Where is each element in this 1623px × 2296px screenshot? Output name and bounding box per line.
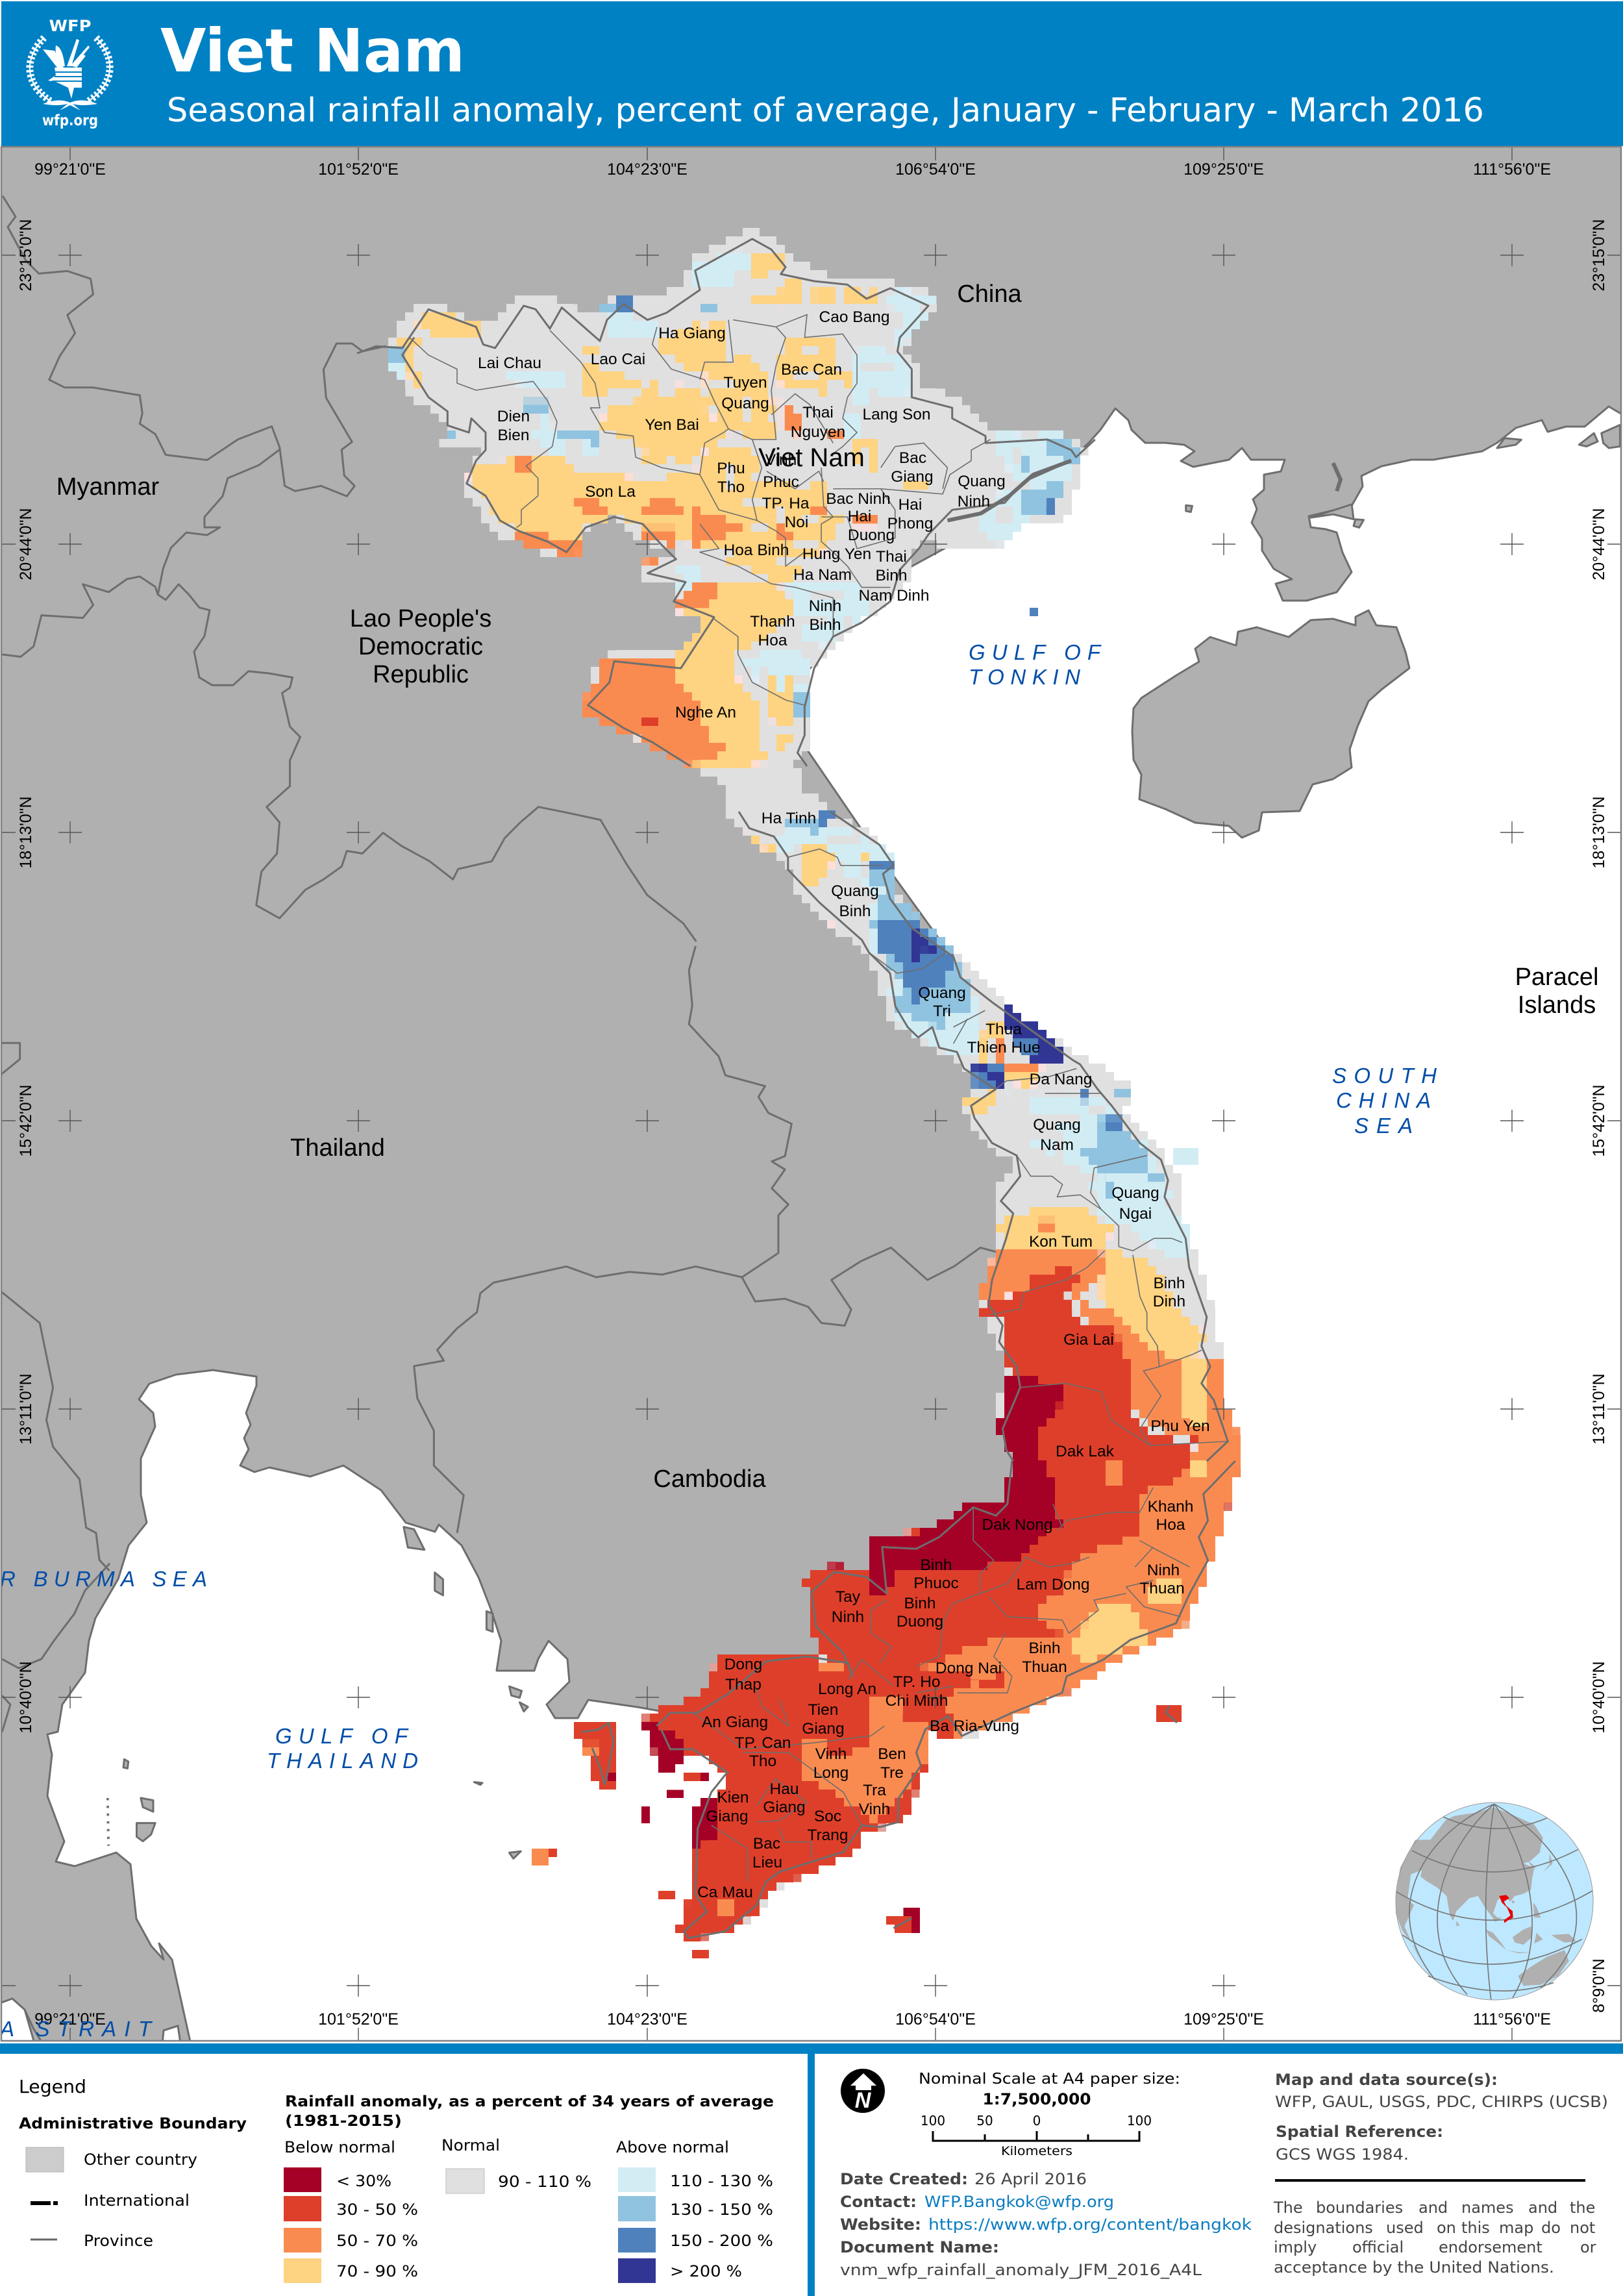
disclaimer: acceptance by the United Nations. — [1274, 2258, 1554, 2277]
province labels north: Dien — [497, 408, 530, 425]
province labels south: Ninh — [832, 1608, 864, 1626]
province labels north: TP. Ha — [762, 495, 810, 512]
legend: rainfall anomaly: (1981-2015) — [285, 2113, 402, 2130]
latitude labels right: 20°44'0"N — [1590, 508, 1608, 580]
province labels centre — [762, 810, 1210, 1460]
sea labels: CHINA — [1336, 1088, 1431, 1112]
province labels south: Thap — [725, 1676, 762, 1693]
latitude labels right: 15°42'0"N — [1590, 1084, 1608, 1157]
disclaimer: boundaries — [1316, 2199, 1403, 2217]
province labels centre: Tri — [933, 1003, 951, 1020]
longitude labels top: 111°56'0"E — [1473, 160, 1551, 179]
sea labels: GULF OF — [275, 1724, 409, 1748]
legend: administrative boundary: Other country — [84, 2151, 197, 2169]
province labels south: Lam Dong — [1016, 1576, 1090, 1593]
disclaimer: and — [1528, 2199, 1557, 2217]
province labels north: Lai Chau — [478, 355, 541, 372]
latitude labels left: 18°13'0"N — [17, 796, 35, 869]
sea labels: GULF OF — [969, 640, 1102, 664]
country labels: Democratic — [358, 633, 483, 660]
raster: navy over 200 percent — [906, 923, 1061, 1089]
legend: administrative boundary: Province — [84, 2232, 153, 2250]
province labels north: Noi — [785, 514, 808, 531]
disclaimer: names — [1461, 2199, 1514, 2217]
province labels south: Thuan — [1022, 1658, 1067, 1676]
legend class labels: < 30% — [336, 2172, 391, 2190]
sources and spatial reference: GCS WGS 1984. — [1276, 2145, 1409, 2164]
raster: red 30-50 percent Nghe An — [642, 716, 661, 728]
scale block: 1:7,500,000 — [983, 2090, 1091, 2108]
sea labels: R BURMA SEA — [0, 1567, 207, 1591]
raster: southern red base 30-50 percent — [632, 1461, 1240, 1941]
province labels north: Binh — [875, 567, 908, 584]
disclaimer: do — [1541, 2219, 1561, 2237]
province labels south: Bac — [753, 1835, 780, 1853]
province labels north: Hoa — [758, 632, 787, 649]
strait corner — [2, 1997, 35, 2040]
legend: rainfall anomaly: Rainfall anomaly, as a percent of 34 years of average — [285, 2093, 774, 2110]
province labels north: Thai — [802, 404, 834, 421]
province labels south: Giang — [763, 1799, 806, 1816]
province labels centre: Ha Tinh — [762, 810, 816, 827]
latitude labels right: 13°11'0"N — [1590, 1373, 1608, 1445]
logo: WFP emblem — [30, 17, 110, 129]
latitude labels left: 23°15'0"N — [17, 219, 35, 292]
globe Viet Nam highlight — [1499, 1895, 1513, 1923]
swatch normal — [446, 2169, 484, 2193]
province labels south: Vinh — [815, 1745, 847, 1763]
country labels: Lao People's — [350, 605, 491, 632]
province labels south: Tay — [836, 1588, 861, 1606]
province labels north: Tho — [717, 479, 745, 496]
province labels south: Dong — [725, 1656, 762, 1673]
scale bar: 0 — [1033, 2113, 1041, 2128]
province labels north: Bac Ninh — [826, 490, 891, 508]
province labels south: Long — [813, 1764, 849, 1782]
swatch: other country — [26, 2147, 64, 2172]
province labels north: Lao Cai — [591, 351, 645, 368]
province labels north: Yen Bai — [645, 416, 699, 434]
disclaimer: the — [1570, 2199, 1595, 2217]
document details: WFP.Bangkok@wfp.org — [924, 2193, 1114, 2211]
province labels south: Soc — [814, 1808, 841, 1825]
scale bar — [921, 2113, 1152, 2158]
province labels centre: Phu Yen — [1150, 1417, 1210, 1435]
document details: Document Name: — [840, 2238, 999, 2256]
longitude labels top: 99°21'0"E — [34, 160, 106, 179]
sea labels: SEA — [1354, 1114, 1413, 1138]
sea labels: THAILAND — [267, 1749, 418, 1773]
province labels north: Tuyen — [723, 374, 767, 392]
legend: administrative boundary: Legend — [19, 2076, 86, 2097]
raster: yellow patches 70-90 percent — [390, 249, 928, 753]
scale bar: 100 — [1127, 2113, 1152, 2128]
province labels north: Nghe An — [675, 704, 736, 721]
locator globe — [1396, 1803, 1593, 2000]
scale bar: 100 — [921, 2113, 945, 2128]
disclaimer: used — [1386, 2219, 1424, 2237]
sea labels: SOUTH — [1332, 1064, 1437, 1088]
disclaimer: and — [1419, 2199, 1448, 2217]
longitude labels top: 104°23'0"E — [607, 160, 688, 179]
province labels south: Phuoc — [913, 1575, 959, 1592]
legend class labels: 150 - 200 % — [670, 2232, 773, 2250]
province labels north: Ha Nam — [793, 566, 852, 584]
province labels north: Lang Son — [863, 406, 930, 423]
legend: rainfall anomaly: Below normal — [284, 2138, 395, 2156]
offshore islands: Gulf of Thailand — [108, 1527, 528, 1858]
sea and coastline — [0, 406, 1623, 2078]
document details: https://www.wfp.org/content/bangkok — [928, 2215, 1252, 2234]
country boundaries — [0, 196, 1000, 2041]
sea labels: TONKIN — [969, 665, 1080, 689]
province labels centre: Dinh — [1153, 1293, 1185, 1310]
disclaimer: on — [1437, 2219, 1456, 2237]
disclaimer: this — [1461, 2219, 1490, 2237]
province labels north: Hai — [848, 508, 871, 525]
province labels south: Ben — [878, 1745, 906, 1763]
line: international boundary — [31, 2201, 58, 2205]
province labels north — [478, 308, 1006, 721]
province labels north: Phong — [887, 515, 933, 532]
raster: light blue solid core — [869, 907, 1193, 1263]
province labels north: Cao Bang — [819, 308, 889, 326]
longitude labels bottom: 104°23'0"E — [607, 2010, 688, 2028]
latitude labels left — [17, 219, 35, 1734]
legend class labels: 70 - 90 % — [336, 2262, 418, 2280]
scale bar: Kilometers — [1001, 2144, 1072, 2158]
latitude labels right: 18°13'0"N — [1590, 796, 1608, 869]
province labels north: Duong — [848, 527, 895, 544]
scale block: Nominal Scale at A4 paper size: — [919, 2071, 1180, 2088]
longitude labels bottom: 99°21'0"E — [34, 2010, 106, 2028]
raster: yellow solid 70-90 percent — [467, 320, 795, 766]
swatches above normal — [618, 2167, 656, 2283]
country labels: Viet Nam — [758, 443, 865, 472]
province labels north: Ninh — [958, 493, 990, 510]
province labels south: Trang — [807, 1827, 849, 1844]
country labels: Cambodia — [653, 1466, 766, 1493]
raster: blues north — [386, 295, 1168, 1201]
province labels south: Giang — [706, 1808, 749, 1825]
raster: medium blue 130-150 percent central — [784, 816, 1168, 1201]
raster: light blue patches — [386, 246, 1193, 1267]
disclaimer: endorsement — [1439, 2238, 1542, 2256]
sources and spatial reference: Map and data source(s): — [1275, 2071, 1498, 2089]
disclaimer: or — [1580, 2238, 1596, 2256]
country labels: Republic — [373, 661, 469, 688]
province labels south: Khanh — [1148, 1498, 1193, 1516]
province labels south: Hau — [770, 1780, 799, 1798]
province labels south: Thuan — [1139, 1580, 1185, 1597]
document details: Date Created: — [840, 2170, 968, 2188]
raster: central highlands — [728, 820, 1249, 1466]
disclaimer: The — [1273, 2199, 1303, 2217]
longitude labels top: 109°25'0"E — [1183, 160, 1264, 179]
country labels — [56, 281, 1598, 1493]
document details: 26 April 2016 — [974, 2170, 1087, 2188]
legend: administrative boundary: Administrative Boundary — [19, 2115, 247, 2132]
longitude labels bottom: 109°25'0"E — [1183, 2010, 1264, 2028]
raster: maroon under 30 percent — [632, 1461, 1067, 1850]
legend class labels: 30 - 50 % — [336, 2201, 418, 2219]
legend class labels: 110 - 130 % — [670, 2172, 773, 2190]
document details: Website: — [840, 2215, 921, 2234]
province labels south: Hoa — [1156, 1516, 1185, 1534]
province labels centre: Dak Lak — [1056, 1443, 1115, 1460]
province labels south: TP. Can — [735, 1734, 791, 1752]
legend class labels: 90 - 110 % — [498, 2173, 591, 2191]
document details: Contact: — [840, 2193, 917, 2211]
province labels south: Binh — [1028, 1640, 1061, 1657]
province labels south: Duong — [897, 1613, 943, 1630]
document details: vnm_wfp_rainfall_anomaly_JFM_2016_A4L — [840, 2261, 1202, 2279]
province labels centre: Kon Tum — [1029, 1233, 1093, 1251]
province labels north: Thanh — [750, 613, 795, 630]
disclaimer — [1273, 2199, 1596, 2277]
longitude labels top — [34, 160, 1551, 179]
province labels north: Vinh — [765, 451, 797, 469]
province labels north: Thai — [876, 548, 907, 566]
sources and spatial reference: WFP, GAUL, USGS, PDC, CHIRPS (UCSB) — [1275, 2093, 1608, 2111]
province and national boundaries — [357, 239, 1235, 1938]
province labels north: Hai — [898, 496, 922, 514]
legend class labels: > 200 % — [670, 2262, 742, 2280]
province labels centre: Quang — [1111, 1184, 1159, 1202]
globe graticule — [1396, 1804, 1592, 1999]
province labels centre: Nam — [1040, 1136, 1074, 1154]
legend: rainfall anomaly: Normal — [441, 2136, 500, 2154]
province labels south: Ba Ria-Vung — [930, 1717, 1019, 1735]
province labels north: Quang — [721, 395, 769, 412]
latitude labels left: 15°42'0"N — [17, 1084, 35, 1157]
province labels centre: Thua — [985, 1021, 1022, 1038]
line: province boundary — [31, 2239, 57, 2240]
scale bar: 50 — [976, 2113, 993, 2128]
province labels south: An Giang — [702, 1714, 768, 1731]
raster: dark blue 150-200 percent — [619, 299, 1119, 1129]
raster: southern yellow 70-90 percent — [1071, 1461, 1208, 1660]
longitude labels bottom: 101°52'0"E — [318, 2010, 399, 2028]
province labels south: Ca Mau — [697, 1884, 753, 1901]
icon: north arrow: N — [855, 2088, 872, 2113]
province labels south: Chi Minh — [886, 1692, 948, 1710]
legend class labels — [336, 2172, 773, 2280]
latitude labels left: 10°40'0"N — [17, 1661, 35, 1734]
legend class labels: 50 - 70 % — [336, 2232, 418, 2250]
raster: southern orange 50-70 percent — [716, 1461, 1240, 1913]
province labels centre: Gia Lai — [1063, 1331, 1114, 1349]
province labels centre: Ngai — [1119, 1205, 1152, 1223]
province labels south: Vinh — [859, 1801, 890, 1818]
sea labels: A STRAIT — [0, 2017, 153, 2041]
header band — [1, 1, 1623, 146]
latitude labels left: 20°44'0"N — [17, 508, 35, 580]
province labels south: Lieu — [752, 1854, 782, 1871]
country labels: Islands — [1518, 992, 1596, 1019]
province labels north: Hoa Binh — [724, 542, 789, 559]
logo: WFP emblem: WFP — [49, 17, 91, 35]
footer divider — [808, 2054, 815, 2296]
disclaimer: designations — [1274, 2219, 1373, 2237]
disclaimer: official — [1352, 2238, 1404, 2256]
sources and spatial reference — [1275, 2071, 1608, 2164]
province labels south: Kien — [717, 1789, 749, 1806]
legend: administrative boundary: International — [84, 2191, 190, 2210]
province labels centre: Quang — [1033, 1116, 1081, 1134]
latitude labels right: 23°15'0"N — [1590, 219, 1608, 292]
province labels south: Tra — [863, 1782, 886, 1799]
rainfall raster: percent of average — [386, 229, 1249, 1960]
province labels north: Phu — [717, 460, 745, 477]
province labels south: Tien — [808, 1701, 838, 1719]
province labels centre: Binh — [839, 903, 871, 920]
logo: WFP emblem: wfp.org — [42, 112, 98, 129]
latitude labels right: 8°9'0"N — [1590, 1958, 1608, 2013]
province labels south: Binh — [920, 1556, 952, 1574]
province labels north: Ninh — [809, 597, 841, 615]
legend: administrative boundary — [19, 2076, 247, 2250]
province labels centre: Quang — [831, 882, 879, 900]
province labels north: Nam Dinh — [859, 587, 929, 605]
province labels north: Bac — [899, 449, 926, 467]
legend class labels: 130 - 150 % — [670, 2201, 773, 2219]
Hainan island — [1132, 610, 1409, 838]
title: Viet Nam — [160, 16, 465, 86]
province labels north: Hung Yen — [802, 545, 871, 563]
subtitle: Seasonal rainfall anomaly, percent of average, January - February - March 2016 — [167, 92, 1484, 130]
province labels north: Bac Can — [781, 361, 842, 379]
legend: rainfall anomaly: Above normal — [616, 2138, 729, 2156]
footer blue band — [0, 2043, 1623, 2054]
province labels north: Son La — [585, 483, 636, 501]
rule — [1275, 2179, 1585, 2182]
province labels centre: Binh — [1153, 1275, 1185, 1292]
province labels north: Binh — [809, 616, 841, 634]
raster: normal base — [386, 229, 1239, 1941]
longitude labels bottom: 106°54'0"E — [895, 2010, 976, 2028]
globe land — [1396, 1807, 1576, 1986]
province labels south: Binh — [904, 1595, 936, 1612]
swatches below normal — [284, 2167, 321, 2283]
disclaimer: map — [1499, 2219, 1533, 2237]
province labels south: Dong Nai — [935, 1660, 1002, 1677]
longitude labels bottom: 111°56'0"E — [1473, 2010, 1551, 2028]
longitude labels top: 101°52'0"E — [318, 160, 399, 179]
province labels north: Nguyen — [791, 423, 845, 441]
province labels south: Ninh — [1147, 1562, 1180, 1579]
document details — [840, 2170, 1252, 2279]
latitude labels left: 13°11'0"N — [17, 1373, 35, 1445]
province labels centre: Quang — [918, 984, 966, 1002]
raster: offshore island cells — [534, 430, 1198, 1960]
raster: red pockets — [825, 1501, 1139, 1759]
latitude labels right: 10°40'0"N — [1590, 1661, 1608, 1734]
province labels south: Tre — [880, 1764, 904, 1782]
legend: rainfall anomaly — [284, 2093, 774, 2283]
scale block — [919, 2071, 1180, 2158]
sources and spatial reference: Spatial Reference: — [1276, 2123, 1443, 2141]
province labels south: Long An — [818, 1680, 876, 1698]
province labels south: TP. Ho — [893, 1673, 941, 1691]
country labels: Thailand — [290, 1134, 385, 1162]
province labels north: Bien — [497, 427, 530, 444]
latitude labels right — [1590, 219, 1608, 2013]
province labels centre: Thien Hue — [967, 1039, 1041, 1056]
offshore islands: South China coast — [1186, 425, 1620, 527]
province labels south: Dak Nong — [982, 1516, 1052, 1534]
province labels centre: Da Nang — [1030, 1071, 1092, 1088]
province labels north: Giang — [891, 468, 934, 486]
disclaimer: imply — [1274, 2238, 1317, 2256]
longitude labels top: 106°54'0"E — [895, 160, 976, 179]
province labels north: Phuc — [763, 473, 799, 491]
sea labels — [0, 640, 1437, 2041]
province labels south: Tho — [749, 1753, 776, 1770]
province labels south: Giang — [802, 1720, 845, 1738]
country labels: Paracel — [1515, 964, 1598, 991]
province labels south — [697, 1498, 1193, 1901]
disclaimer: not — [1570, 2219, 1595, 2237]
raster: orange 50-70 percent north — [514, 401, 952, 766]
country labels: China — [957, 281, 1022, 308]
longitude labels bottom — [34, 2010, 1551, 2028]
country labels: Myanmar — [56, 473, 160, 501]
province labels north: Quang — [958, 473, 1006, 490]
icon: north arrow — [841, 2069, 885, 2113]
province labels north: Ha Giang — [658, 325, 726, 342]
